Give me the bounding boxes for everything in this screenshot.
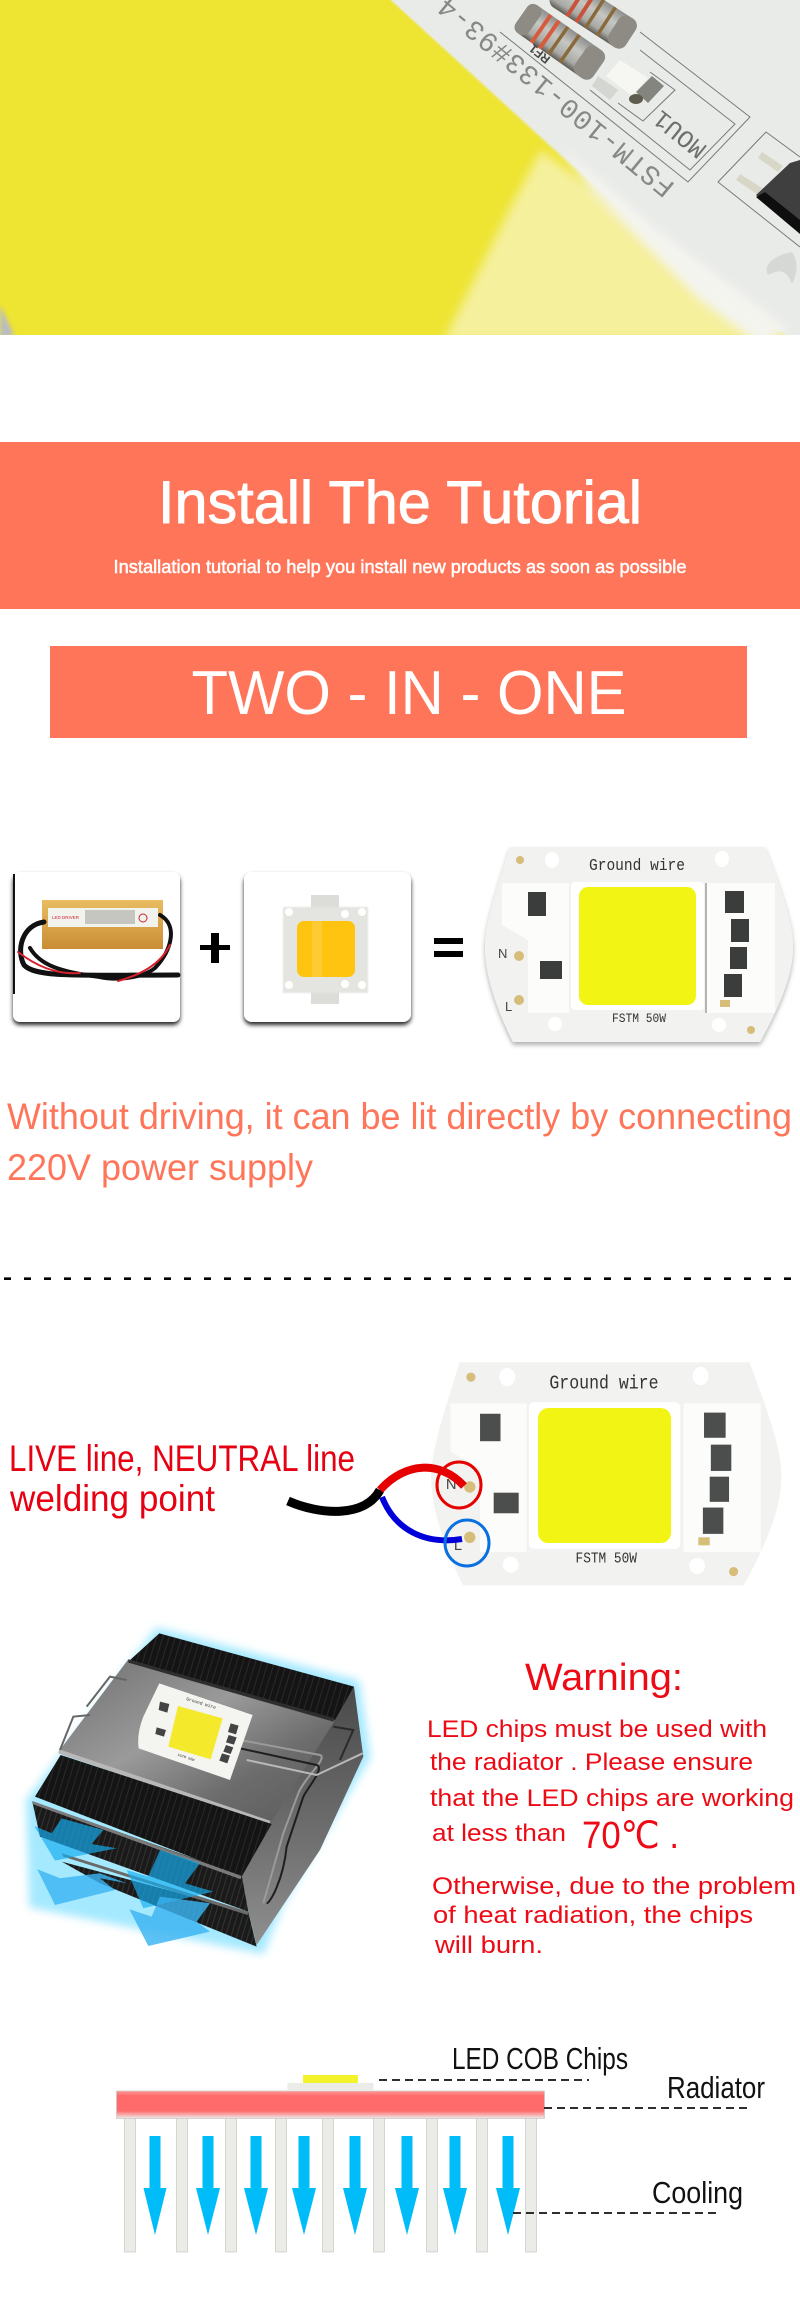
hero photo: close-up of LED chip: MOU1 [648,103,713,163]
warning body [427,1716,796,1959]
description text: 220V power supply [7,1147,313,1188]
labels: Cooling [652,2175,743,2210]
mini COB module: Ground wire [185,1696,217,1711]
warning body: Otherwise, due to the problem [432,1873,796,1900]
mounting holes [545,851,729,1032]
labels: LED COB Chips [452,2041,628,2076]
chip mount [288,2083,374,2091]
warning body: will burn. [434,1932,543,1959]
mounting hole [767,252,796,284]
welding label: LIVE line, NEUTRAL line [9,1438,355,1479]
welding label [9,1438,355,1519]
red circle [437,1462,481,1508]
module: FSTM 50W [576,1551,637,1567]
warning body: the radiator . Please ensure [430,1749,753,1776]
description text: Without driving, it can be lit directly by connecting [7,1096,792,1137]
LED COB module with ground wire [485,847,793,1042]
amber phosphor [297,921,355,977]
resistors [512,0,640,83]
wires [288,1468,464,1540]
LED COB module wiring diagram [288,1362,781,1585]
heat pipes [60,1677,363,1903]
leader lines [379,2080,752,2213]
black components [528,891,749,997]
yellow chip [303,2075,358,2083]
fins [124,2118,536,2252]
resistors: RF1 [526,41,553,67]
warning body: that the LED chips are working [430,1785,794,1812]
module: Ground wire [549,1373,659,1395]
front fins [35,1755,272,1877]
warning heading: Warning: [525,1657,683,1699]
radiator cooling diagram [116,2041,765,2252]
mini COB module [138,1683,253,1780]
mini COB module: FSTM 50W [177,1754,195,1763]
warning text [427,1657,796,1959]
two-in-one banner: TWO - IN - ONE [192,659,626,728]
chip tabs [311,895,339,1004]
board print: Ground wire [589,857,685,876]
driver wires [18,915,178,981]
chip holes [285,908,366,989]
black transistor [736,152,800,234]
labels [452,2041,765,2210]
cooling arrows [34,1818,213,1908]
banner subheading: Installation tutorial to help you install new products as soon as possible [114,557,686,577]
module: L [454,1538,462,1554]
driver box: LED DRIVER [52,915,80,920]
card: LED driver [13,872,180,1022]
warning body: LED chips must be used with [427,1716,767,1743]
module [431,1362,781,1585]
small SMD component [592,60,664,104]
warning body: at less than [432,1820,566,1847]
card: LED chip [244,872,411,1022]
heatsink with COB module and airflow [26,1627,371,1954]
labels: Radiator [667,2070,765,2105]
equals sign [434,938,463,957]
banner heading: Install The Tutorial [158,469,642,536]
warning body: of heat radiation, the chips [433,1902,753,1929]
down arrows [144,2136,520,2235]
description text [7,1096,792,1188]
welding label: welding point [9,1478,216,1519]
warning body: 70℃ . [582,1815,679,1857]
solder points [514,856,755,1034]
module: N [446,1477,457,1493]
LED COB module with ground wire: FSTM 50W [612,1011,666,1026]
hero photo: close-up of LED chip [0,0,800,345]
base plate [116,2091,544,2118]
LED COB module with ground wire: L [505,999,512,1014]
side body [240,1687,363,1945]
two-in-one banner [50,646,747,738]
top plate [59,1659,335,1824]
LED COB module with ground wire: N [498,946,507,961]
plus sign [200,933,230,963]
driver box [42,900,163,949]
blue circle [445,1520,489,1566]
title banner [0,442,800,609]
silk outlines [500,32,800,247]
cooling arrows front [37,1869,210,1946]
rear fins [128,1633,354,1722]
